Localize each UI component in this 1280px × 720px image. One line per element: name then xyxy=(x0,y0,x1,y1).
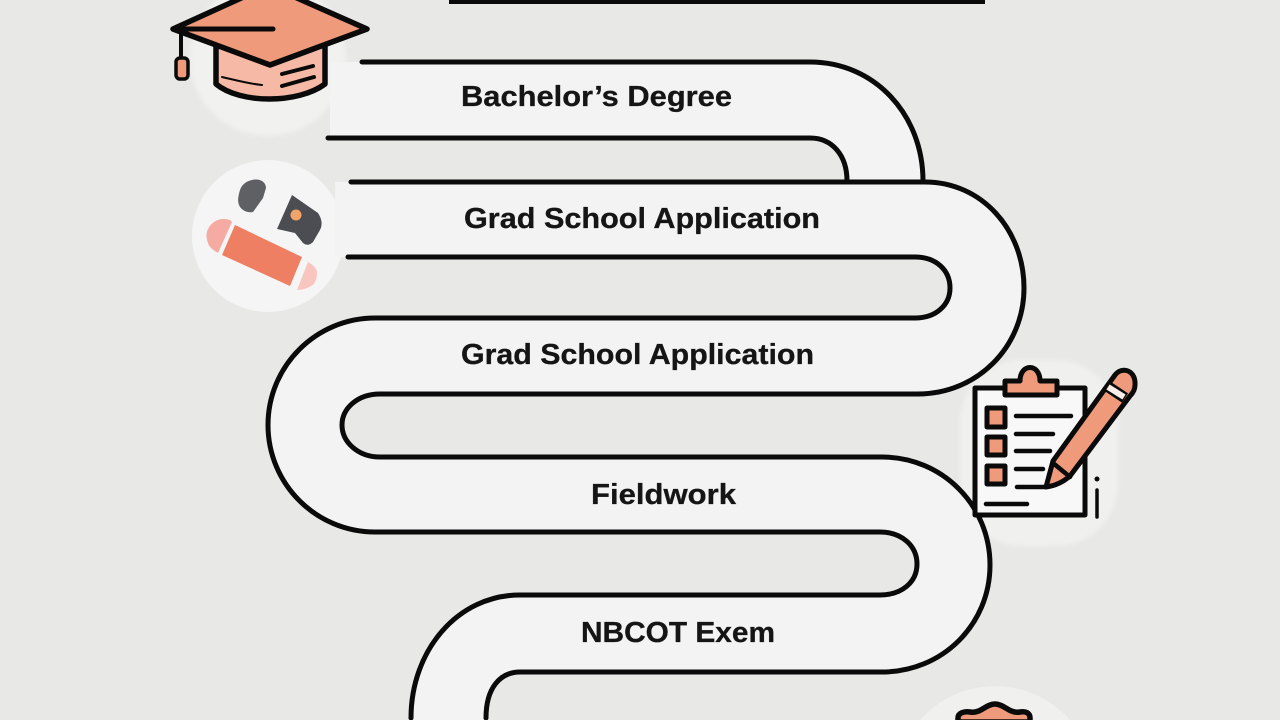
icon backdrop: badge xyxy=(920,686,1070,720)
step label: Bachelor's Degree: Bachelor’s Degree xyxy=(461,81,732,113)
icon: graduation cap xyxy=(173,0,367,99)
winding road xyxy=(268,62,1024,720)
icon backdrop: graduation cap xyxy=(190,0,346,136)
step label: NBCOT Exem: NBCOT Exem xyxy=(581,617,775,649)
icon backdrop: checklist xyxy=(960,360,1118,546)
icon: badge xyxy=(958,704,1030,720)
step label: Fieldwork: Fieldwork xyxy=(591,479,737,511)
top bar xyxy=(449,0,985,4)
icon: clipboard with pencil xyxy=(975,368,1135,517)
icon: tools xyxy=(206,179,322,290)
step label: Grad School Application (first): Grad School Application xyxy=(464,203,820,235)
icon backdrop: tools xyxy=(192,160,344,312)
step label: Grad School Application (second): Grad School Application xyxy=(461,339,814,371)
